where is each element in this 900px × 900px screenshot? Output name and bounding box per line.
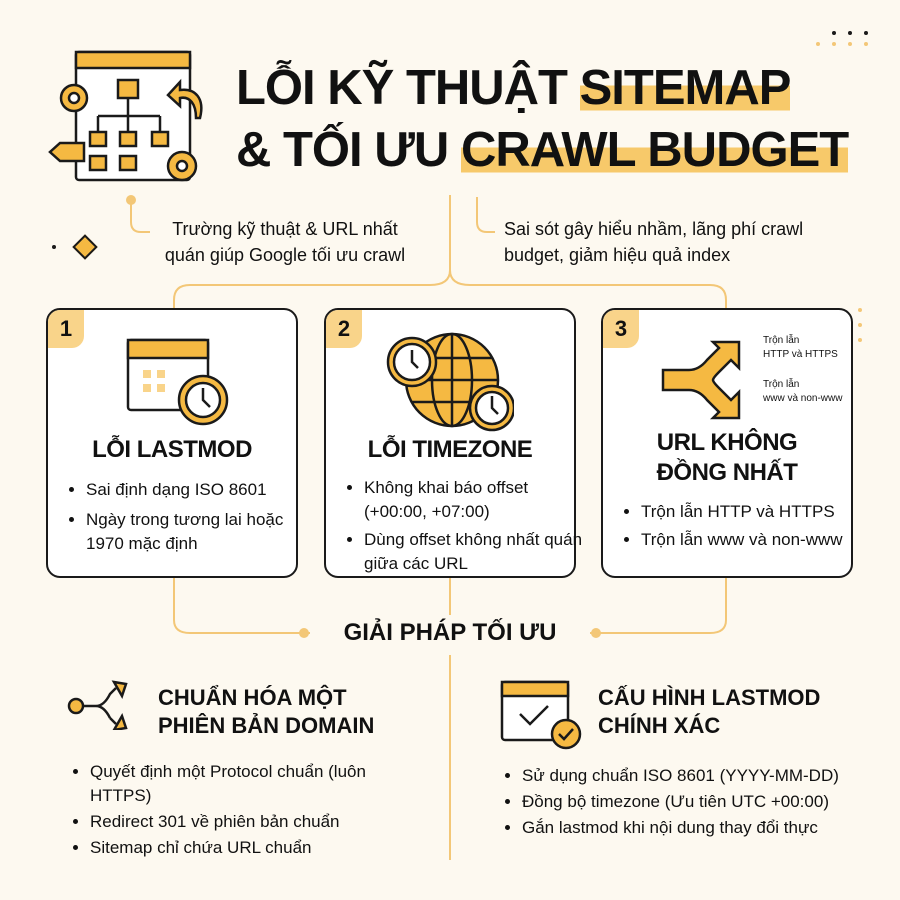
solution 2: CẤU HÌNH LASTMOD — [598, 685, 820, 710]
card 3: www và non-www — [763, 393, 842, 404]
card 3: 3 — [615, 316, 627, 341]
icon: calendar check — [500, 680, 582, 750]
title: LỖI KỸ THUẬT SITEMAP — [236, 61, 790, 115]
card 2: Không khai báo offset (+00:00, +07:00) — [364, 478, 528, 521]
icon: sitemap — [48, 50, 203, 182]
callout labels — [763, 334, 838, 360]
subtitle right: Sai sót gây hiểu nhầm, lãng phí crawl budget, giảm hiệu quả index — [504, 219, 803, 265]
icon: split arrow — [662, 340, 740, 420]
card 1 — [46, 308, 298, 578]
solution 1: PHIÊN BẢN DOMAIN — [158, 713, 374, 738]
solution 2 — [500, 680, 839, 837]
card 2 — [324, 308, 576, 578]
solution 1: CHUẨN HÓA MỘT — [158, 685, 347, 710]
title: & TỐI ƯU CRAWL BUDGET — [236, 123, 848, 177]
solution 1 — [68, 680, 374, 857]
callout labels: Trộn lẫn — [763, 335, 799, 346]
section heading: GIẢI PHÁP TỐI ƯU — [344, 619, 556, 646]
icon: branch — [68, 680, 128, 730]
solution 2: Sử dụng chuẩn ISO 8601 (YYYY-MM-DD) — [522, 766, 839, 785]
card 3 — [601, 308, 853, 578]
card 3: Trộn lẫn www và non-www — [641, 530, 843, 549]
card 1: LỖI LASTMOD — [92, 436, 252, 463]
solution 2: Đồng bộ timezone (Ưu tiên UTC +00:00) — [522, 792, 829, 811]
card 3: Trộn lẫn — [763, 379, 799, 390]
card 3: Trộn lẫn HTTP và HTTPS — [641, 502, 835, 521]
card 1: 1 — [60, 316, 72, 341]
solution 1: Quyết định một Protocol chuẩn (luôn HTTPS) — [90, 762, 366, 805]
card 2: Dùng offset không nhất quán giữa các URL — [364, 530, 582, 573]
solution 1: Sitemap chỉ chứa URL chuẩn — [90, 838, 311, 857]
icon: calendar clock — [126, 338, 228, 426]
card 2: LỖI TIMEZONE — [368, 436, 532, 463]
solution 1: Redirect 301 về phiên bản chuẩn — [90, 812, 340, 831]
card 2: 2 — [338, 316, 350, 341]
solution 2: Gắn lastmod khi nội dung thay đổi thực — [522, 818, 818, 837]
callout labels: HTTP và HTTPS — [763, 349, 838, 360]
icon: globe clocks — [386, 332, 514, 432]
subtitle left: Trường kỹ thuật & URL nhất quán giúp Google tối ưu crawl — [165, 219, 405, 265]
card 1: Sai định dạng ISO 8601 — [86, 480, 267, 499]
card 1: Ngày trong tương lai hoặc 1970 mặc định — [86, 510, 283, 553]
solution 2: CHÍNH XÁC — [598, 713, 720, 738]
card 3: URL KHÔNG — [657, 429, 797, 456]
title — [236, 60, 849, 177]
card 3: ĐỒNG NHẤT — [657, 459, 797, 486]
deco diamond — [72, 234, 98, 260]
